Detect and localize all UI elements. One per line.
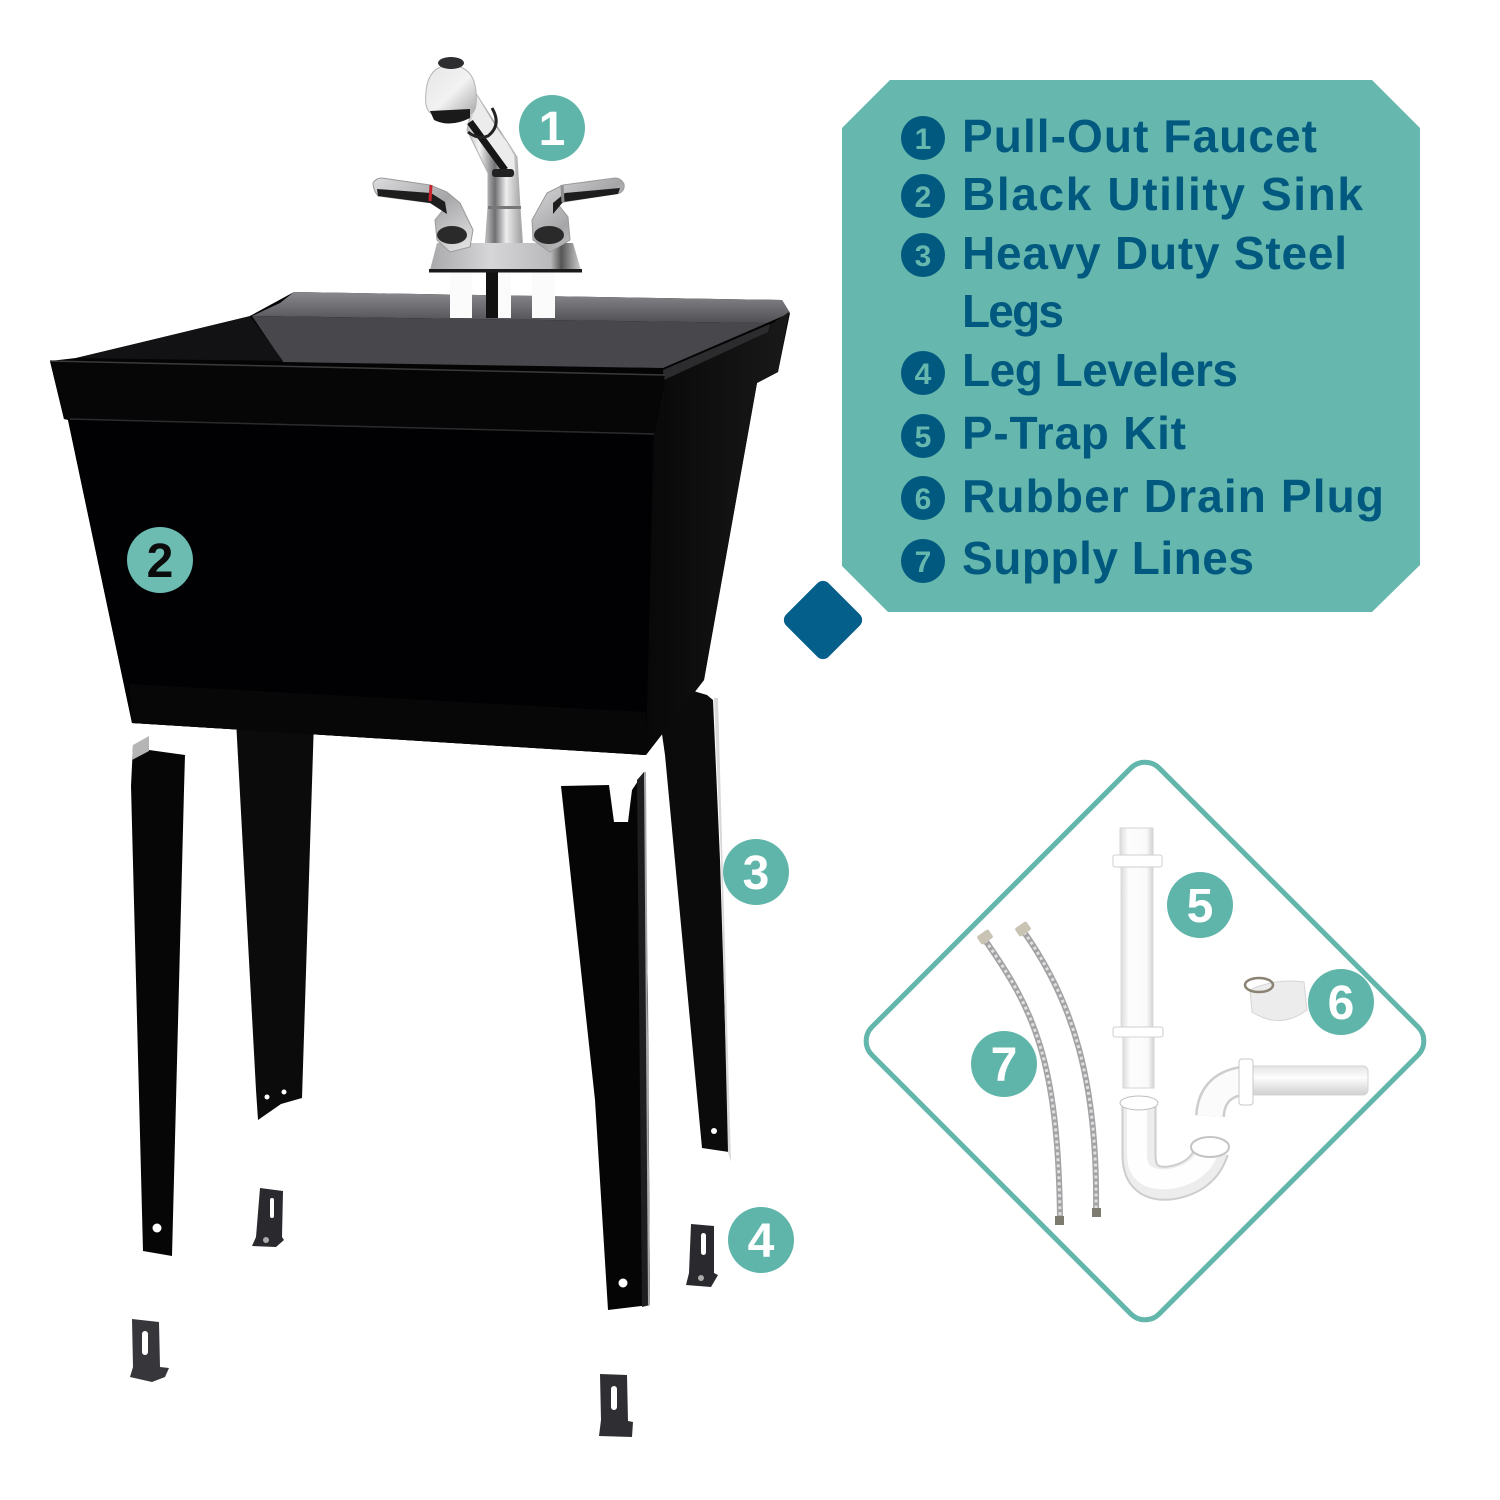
leveler: back right (686, 1224, 718, 1287)
supply lines (976, 921, 1101, 1225)
callout 3: 3 (743, 847, 769, 900)
sink silhouette (50, 292, 790, 755)
list item 7: Supply Lines (962, 532, 1254, 584)
leg: back right (660, 690, 731, 1162)
leg: front right (561, 772, 650, 1310)
leveler: front right (599, 1374, 633, 1437)
sink inner left wall (76, 316, 283, 361)
callout 5: 5 (1187, 880, 1213, 933)
sink front rim (50, 361, 665, 434)
callout 4 (728, 1207, 794, 1273)
spray head (426, 65, 476, 114)
list item 4: 4 (915, 358, 932, 391)
callouts: numbered markers (127, 95, 1374, 1273)
list item 7: 7 (915, 546, 931, 579)
spout (467, 92, 523, 250)
p-trap bend (1120, 1096, 1229, 1183)
callout 3 (723, 839, 789, 905)
callout 6 (1308, 969, 1374, 1035)
leveler: back left (252, 1188, 284, 1247)
rubber drain plug (1245, 978, 1307, 1021)
sink front body (68, 420, 653, 755)
callout 2 (127, 527, 193, 593)
leg: back left (236, 720, 314, 1120)
sink back wall (252, 316, 767, 368)
tailpiece tube (1113, 828, 1163, 1088)
left handle (373, 178, 473, 252)
sink back deck (252, 292, 790, 323)
right handle (532, 178, 624, 252)
faucet (373, 57, 624, 318)
list item 3: Heavy Duty Steel (962, 227, 1347, 279)
callout 1 (519, 95, 585, 161)
p-trap kit (1113, 828, 1368, 1183)
list item 1: 1 (915, 123, 931, 156)
elbow tube (1210, 1059, 1368, 1116)
list item 4: Leg Levelers (962, 344, 1238, 396)
leg: front left (131, 736, 185, 1256)
base plate (430, 243, 581, 270)
list item 3 (901, 227, 1347, 337)
white supply pipes (450, 273, 555, 318)
list item 2: 2 (915, 181, 931, 214)
blue diamond accent (781, 578, 865, 662)
callout 5 (1167, 872, 1233, 938)
callout 7: 7 (991, 1039, 1017, 1092)
legs (131, 690, 731, 1310)
callout 2: 2 (147, 535, 173, 588)
sink basin (50, 292, 790, 755)
list item 6: 6 (915, 483, 931, 516)
callout 7 (971, 1031, 1037, 1097)
sink side wall (646, 312, 789, 755)
panel background (842, 80, 1420, 612)
leg levelers (130, 1188, 718, 1437)
list item 2: Black Utility Sink (962, 168, 1363, 220)
list item 5: 5 (915, 421, 931, 454)
list item 1: Pull-Out Faucet (962, 110, 1317, 162)
callout 4: 4 (748, 1215, 775, 1268)
leveler: front left (130, 1319, 169, 1382)
panel: parts list (842, 80, 1420, 612)
list item 3: Legs (962, 285, 1064, 337)
list item 6: Rubber Drain Plug (962, 470, 1384, 522)
panel: accessories diamond outline (858, 754, 1432, 1328)
list item 3: 3 (915, 240, 931, 273)
callout 1: 1 (539, 103, 565, 156)
callout 6: 6 (1328, 977, 1354, 1030)
list item 5: P-Trap Kit (962, 407, 1186, 459)
